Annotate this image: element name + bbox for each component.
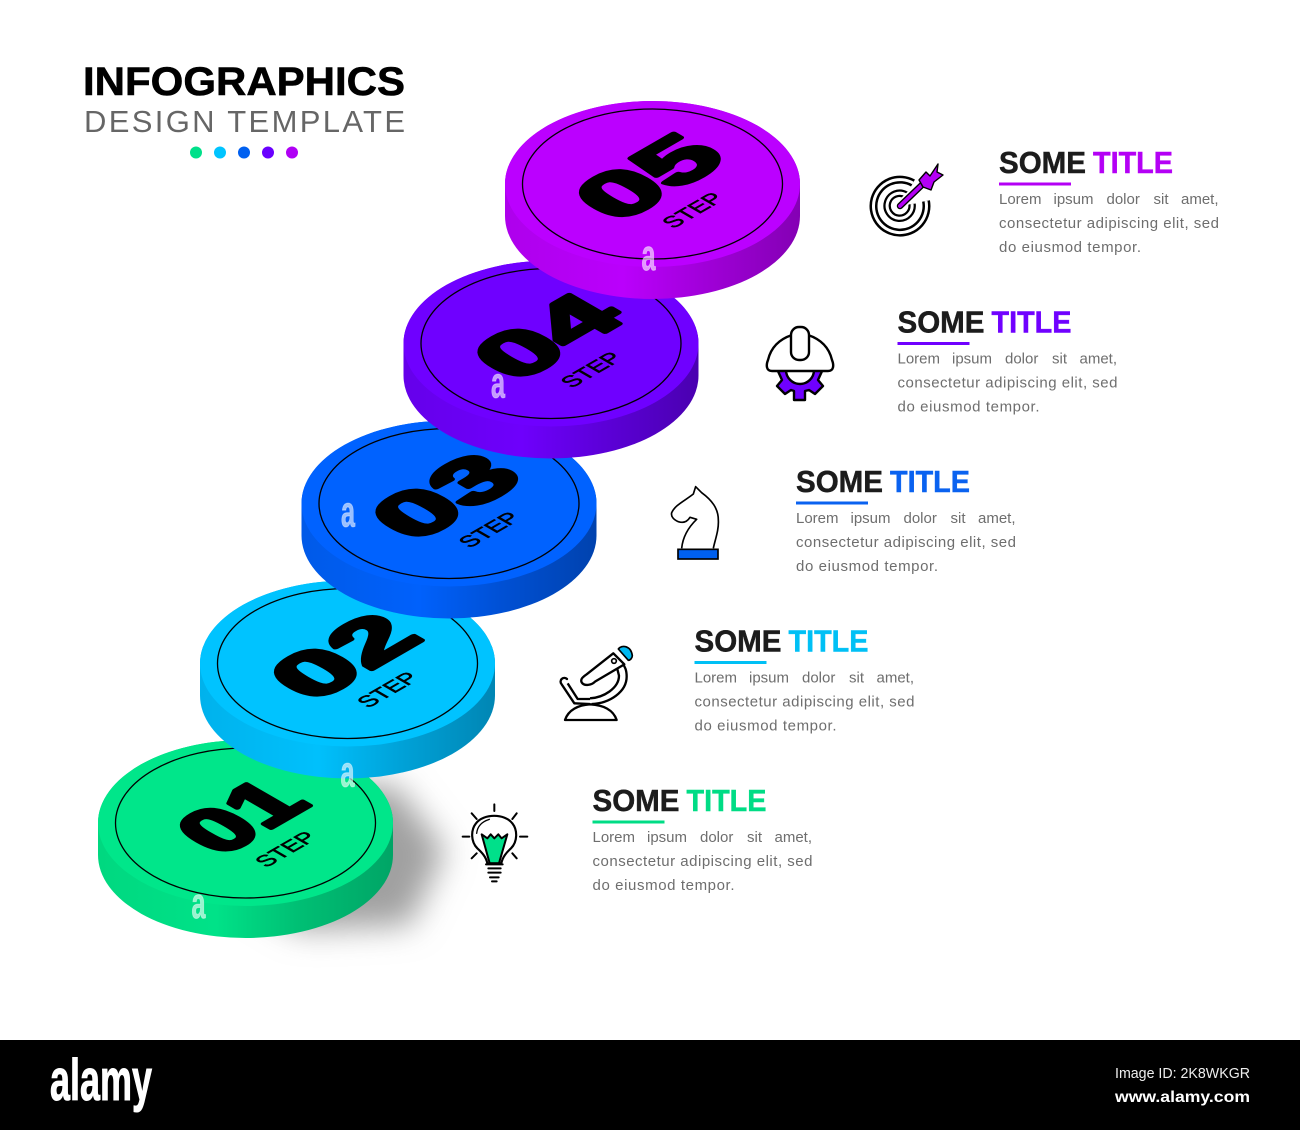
text block: step 03: ipsum (850, 510, 891, 527)
text block: step 04: amet, (1080, 350, 1117, 368)
text block: step 02: sit (849, 670, 865, 686)
footer bar: www.alamy.com (1114, 1089, 1250, 1106)
text block: step 03: dolor (904, 510, 937, 527)
disc: step 02 (200, 580, 495, 796)
text block: step 04: Lorem (898, 350, 940, 368)
icon: target with arrow (873, 164, 943, 233)
text block: step 05: TITLE (1093, 145, 1173, 180)
text block: step 03: sit (950, 510, 966, 527)
text block: step 01: ipsum (647, 829, 687, 846)
text block: step 05: sit (1154, 191, 1169, 208)
text block: step 02: TITLE (788, 624, 868, 658)
text block: step 03: consectetur adipiscing elit, sed (796, 534, 1016, 551)
disc: step 03 (302, 420, 596, 618)
disc: step 04: a (491, 358, 505, 408)
text block: step 05: dolor (1106, 191, 1140, 208)
text block: step 01: dolor (700, 829, 733, 846)
text block: step 03: do eiusmod tempor. (796, 558, 938, 575)
icon: light bulb (463, 804, 527, 881)
text block: step 01: TITLE (686, 783, 766, 818)
text block: step 02: dolor (802, 670, 835, 686)
footer bar: alamy (50, 1048, 152, 1113)
text block: step 03: amet, (978, 510, 1016, 527)
text block: step 05: amet, (1181, 191, 1219, 208)
text block: step 03: Lorem (796, 510, 839, 527)
text block: step 03: TITLE (890, 464, 970, 499)
text block: step 04 (898, 304, 1118, 416)
text block: step 02: ipsum (749, 670, 789, 686)
title: INFOGRAPHICS (83, 60, 405, 104)
text block: step 02: do eiusmod tempor. (694, 718, 836, 734)
disc: step 04: 04 (451, 280, 645, 393)
disc: step 04: STEP (554, 348, 628, 391)
text block: step 05: ipsum (1054, 191, 1094, 208)
text block: step 04: do eiusmod tempor. (898, 398, 1040, 416)
text block: step 05: consectetur adipiscing elit, sed (999, 215, 1219, 232)
disc: step 05: a (642, 231, 656, 280)
text block: step 01: consectetur adipiscing elit, sed (592, 853, 812, 870)
text block: step 04: sit (1052, 350, 1068, 368)
disc: step 01 (98, 740, 393, 938)
text block: step 01: do eiusmod tempor. (592, 877, 734, 894)
main heading (83, 60, 405, 158)
text block: step 04: consectetur adipiscing elit, sed (898, 374, 1118, 392)
text block: step 04: ipsum (952, 350, 992, 368)
icon: microscope (561, 646, 632, 720)
disc: step 05: 05 (552, 121, 747, 234)
text block: step 04: dolor (1005, 350, 1038, 368)
text block: step 02 (694, 624, 914, 734)
footer bar (0, 1040, 1300, 1130)
disc: step 02: 02 (247, 600, 442, 713)
shadow under first disc (250, 785, 445, 930)
text block: step 02: consectetur adipiscing elit, sed (694, 694, 914, 710)
disc: step 05 (505, 101, 800, 299)
text block: step 05: do eiusmod tempor. (999, 239, 1141, 256)
subtitle: DESIGN TEMPLATE (84, 104, 405, 139)
disc: step 03: 03 (349, 440, 543, 553)
icon: chess knight (671, 487, 718, 559)
text block: step 05: Lorem (999, 191, 1042, 208)
text block: step 05: SOME (999, 145, 1086, 180)
text block: step 01: Lorem (592, 829, 635, 846)
disc: step 03: STEP (452, 508, 526, 551)
disc: step 02: a (340, 748, 355, 796)
text block: step 04: SOME (898, 304, 984, 340)
disc: step 05: STEP (656, 189, 730, 232)
text block: step 04: TITLE (992, 304, 1072, 340)
text block: step 03: SOME (796, 464, 883, 499)
text block: step 03 (796, 464, 1016, 575)
disc: step 01: 01 (155, 766, 329, 867)
disc: step 04 (404, 260, 698, 458)
text block: step 01: amet, (774, 829, 812, 846)
disc: step 03: a (341, 488, 355, 536)
footer bar: Image ID: 2K8WKGR (1115, 1065, 1250, 1082)
text block: step 02: SOME (694, 624, 782, 658)
text block: step 01: SOME (592, 783, 680, 818)
disc: step 01: STEP (249, 828, 323, 871)
disc: step 01: a (192, 879, 206, 928)
text block: step 05 (999, 145, 1219, 256)
colour dots (190, 146, 298, 158)
icon: helmet with gear (767, 327, 833, 400)
disc: step 02: STEP (351, 668, 425, 711)
text block: step 02: Lorem (694, 670, 737, 686)
text block: step 01 (592, 783, 812, 894)
text block: step 02: amet, (876, 670, 914, 686)
text block: step 01: sit (747, 829, 763, 846)
